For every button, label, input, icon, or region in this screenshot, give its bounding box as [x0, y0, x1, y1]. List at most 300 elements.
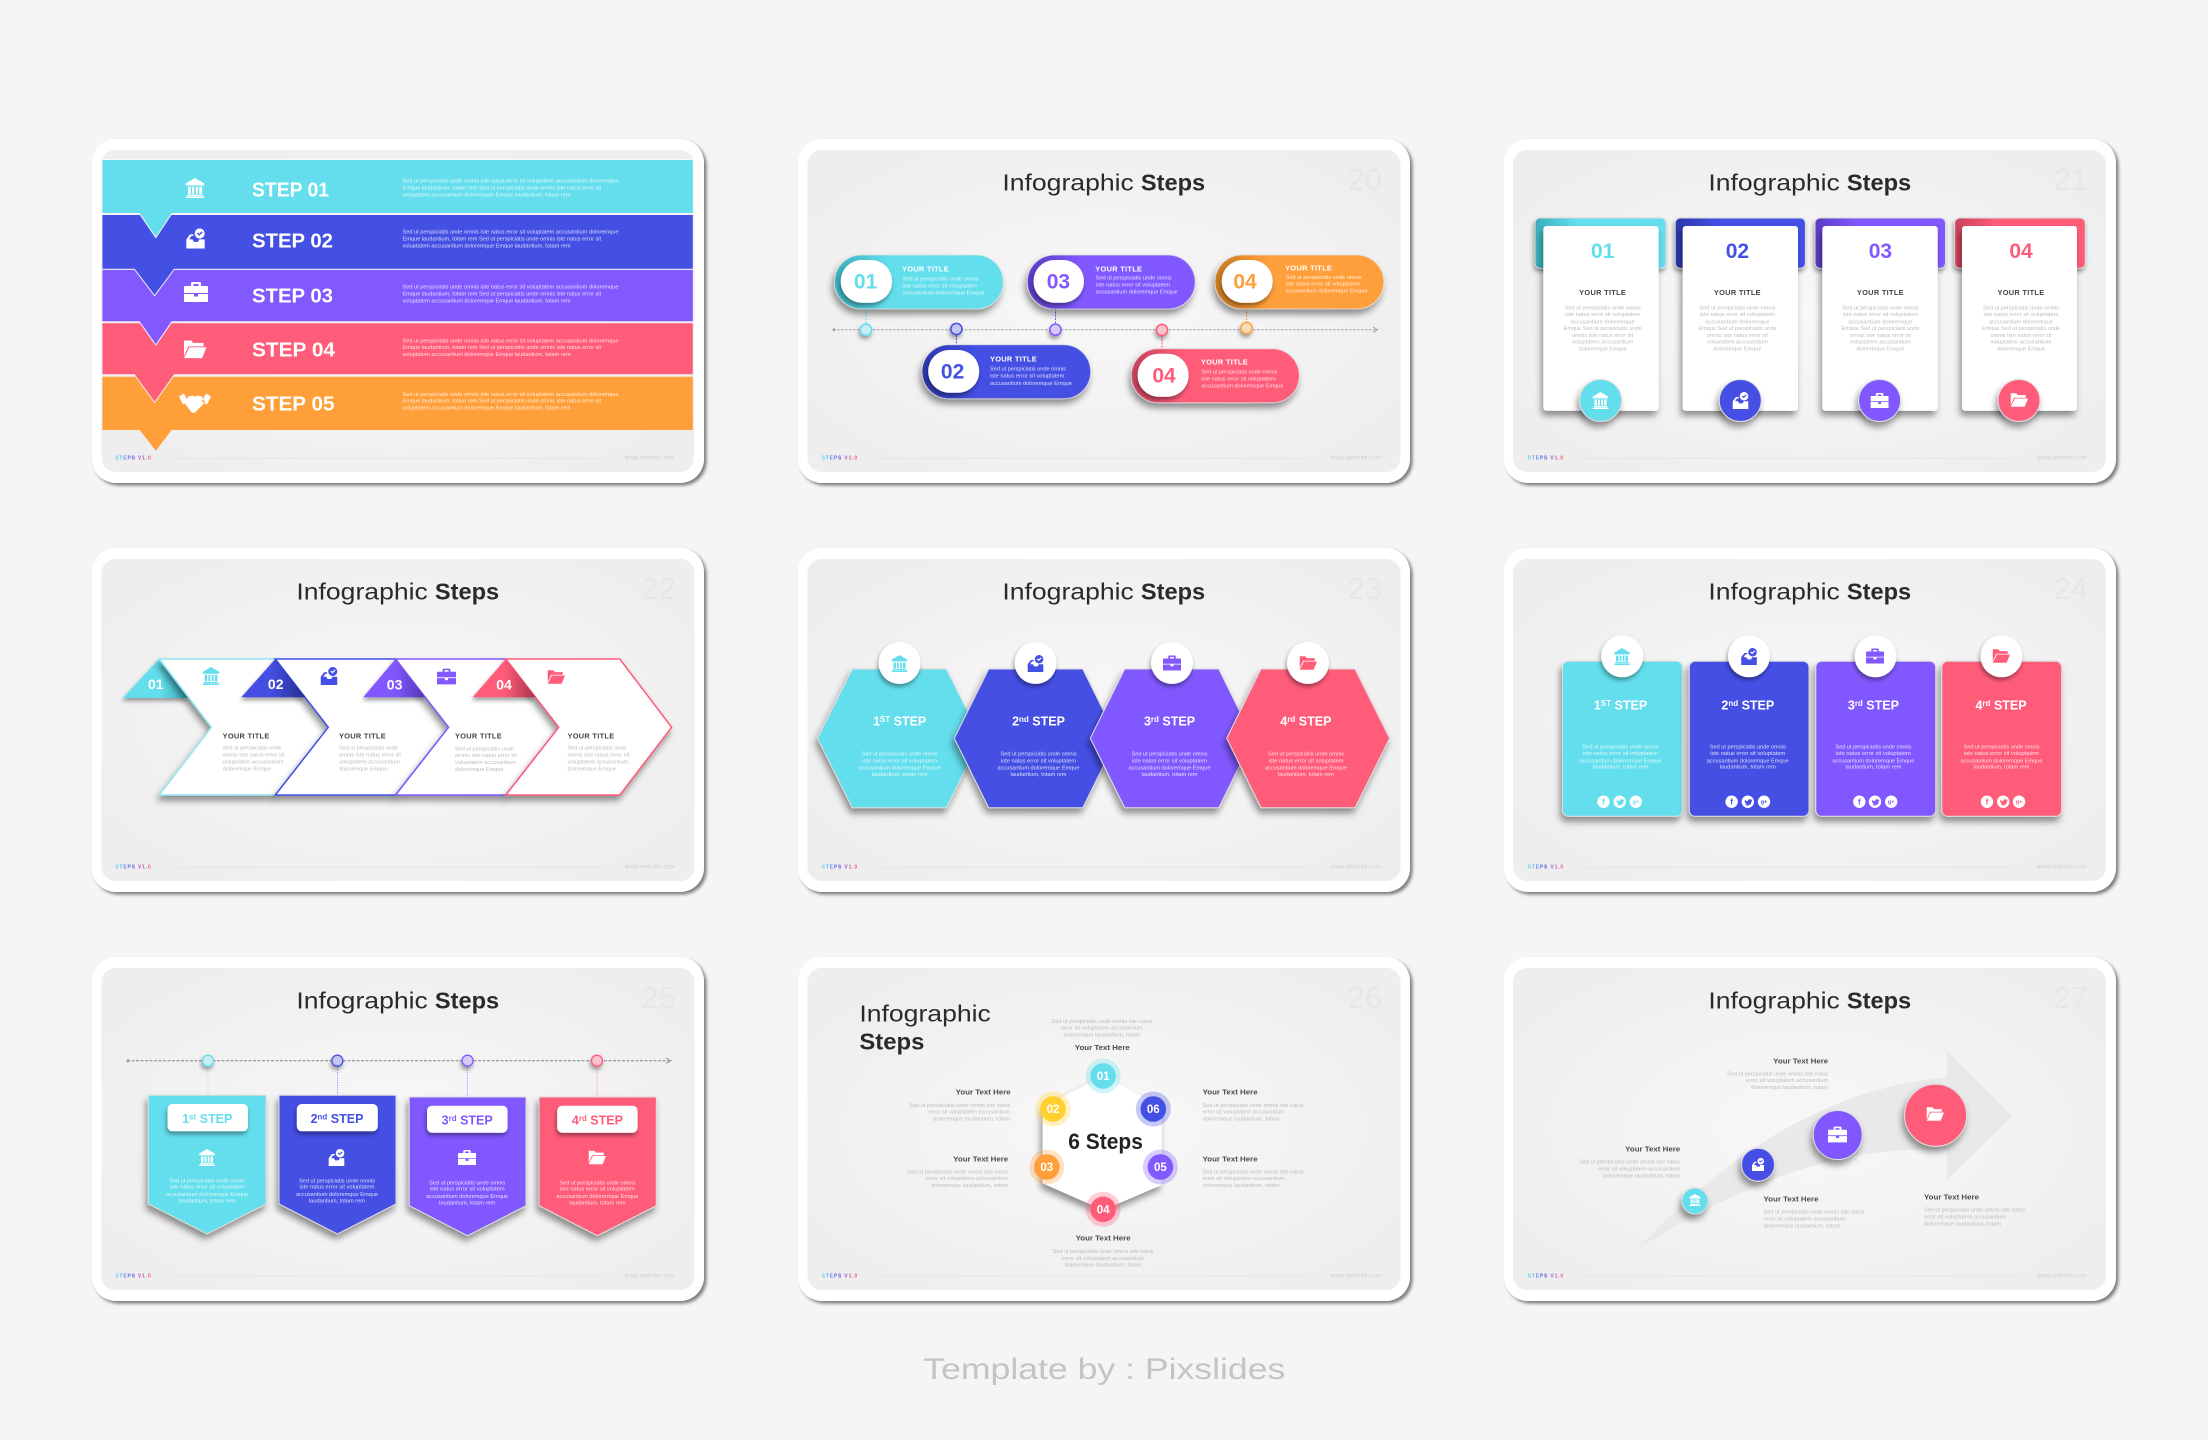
node 01: 01 [1097, 1071, 1110, 1083]
node 03: 03 [1040, 1162, 1053, 1174]
text block: step 05 description: Emque laudantium, totam rem Sed ut perspiciatis unde omnis iste natus error sit [402, 399, 602, 405]
pill: 01: iste natus error sit voluptatem [902, 283, 977, 289]
banner: 2nd step: laudantium, totam rem [309, 1199, 365, 1205]
card: 01: iste natus error sit voluptatem [1565, 312, 1640, 318]
title [859, 1001, 991, 1054]
hexagon: 1st step: 1 [873, 715, 880, 729]
band: step 03 purple [102, 270, 693, 344]
title: Steps [1141, 579, 1205, 605]
card: 04: doloremque Emque [1997, 347, 2045, 353]
text block: step 04 description: Emque laudantium, totam rem Sed ut perspiciatis unde omnis iste natus error sit [402, 345, 602, 351]
panel: slide 19 stacked step bands [92, 139, 704, 483]
node 06 [1136, 1092, 1171, 1126]
panel: slide 23 hexagons [798, 548, 1410, 892]
band: step 05 orange [102, 377, 693, 451]
text block: middle: error sit voluptatem accusantium [1764, 1217, 1846, 1223]
hexagon: 4rd step: laudantium, totam rem [1278, 772, 1334, 778]
hexagon: 1st step: ST [880, 715, 890, 724]
text block: left: error sit voluptatem accusantium [1598, 1166, 1680, 1172]
card: 01: Sed ut perspiciatis unde omnis [1565, 306, 1641, 312]
card: 1st step: Sed ut perspiciatis unde omnis [1582, 745, 1659, 751]
card: 2nd step: STEP [1738, 698, 1774, 712]
chevron: step 01: doloremque Emque [223, 767, 271, 773]
pill: 03: Sed ut perspiciatis unde omnis [1096, 276, 1172, 282]
card: 01: voluptatem accusantium [1572, 340, 1633, 346]
text block: bottom: error sit voluptatem accusantium [1062, 1256, 1144, 1262]
pill: 03: 03 [1047, 270, 1070, 293]
icon: briefcase [184, 282, 208, 302]
circle: step 1 [1682, 1188, 1708, 1214]
hexagon: 1st step: accusantium doloremque Emque [859, 765, 941, 771]
node 04: 04 [1097, 1204, 1110, 1216]
pill: 01: accusantium doloremque Emque [902, 291, 985, 297]
text block: right lower: Your Text Here [1203, 1155, 1258, 1164]
card: 3rd step: Sed ut perspiciatis unde omnis [1835, 745, 1912, 751]
text block: step 05 description: voluptatem accusantium doloremque Emque laudantium, totam rem [402, 406, 570, 412]
banner: 4rd step: iste natus error sit voluptatem [560, 1187, 635, 1193]
card: 1st step: STEP [1611, 698, 1647, 712]
icons: social links card 3: f [1858, 798, 1861, 806]
pill: 03: YOUR TITLE [1095, 264, 1142, 273]
banner: 1st step: STEP [196, 1112, 232, 1126]
banner: 1st step: accusantium doloremque Emque [166, 1192, 248, 1198]
title: Steps [435, 988, 499, 1014]
text block: step 01 description: voluptatem accusantium doloremque Emque laudantium, totam rem [402, 192, 570, 198]
timeline nodes [860, 322, 1252, 336]
connectors [208, 1067, 597, 1097]
chevron: step 03: YOUR TITLE [455, 732, 502, 741]
hexagon: 1st step [818, 642, 981, 808]
card: 01: YOUR TITLE [1579, 288, 1626, 297]
title: Infographic [859, 1001, 991, 1027]
icons: social links card 1 [1597, 796, 1642, 808]
card: 04: 04 [2009, 240, 2033, 263]
icons: social links card 2: g+ [1761, 800, 1767, 806]
text block: step 02 description: Emque laudantium, totam rem Sed ut perspiciatis unde omnis iste natus error sit [402, 236, 602, 242]
text block: step 02 description: Sed ut perspiciatis unde omnis iste natus error sit voluptatem accusantium doloremque [402, 230, 619, 236]
chevron: step 04: Sed ut perspiciatis unde [568, 746, 627, 752]
text block: top [1727, 1056, 1829, 1091]
card: 2nd step: Sed ut perspiciatis unde omnis [1710, 745, 1786, 751]
text block: middle: doloremque laudantium, totam [1764, 1224, 1840, 1230]
pill: 01: YOUR TITLE [902, 264, 949, 273]
text block: right lower: Sed ut perspiciatis unde omnis iste natus [1203, 1169, 1304, 1175]
banner: 2nd step: accusantium doloremque Emque [296, 1192, 378, 1198]
pill: 04 red: accusantium doloremque Emque [1201, 383, 1284, 389]
card: 03: 03 [1869, 240, 1892, 263]
footer [822, 1274, 1381, 1280]
banner: 3rd step: laudantium, totam rem [439, 1201, 495, 1207]
card: 01 [1535, 218, 1666, 422]
text block: left: Your Text Here [1625, 1145, 1680, 1154]
hexagon: 1st step: iste natus error sit voluptatem [862, 758, 937, 764]
text block: middle: Sed ut perspiciatis unde omnis iste natus [1764, 1210, 1865, 1216]
card: 2nd step: iste natus error sit voluptatem [1710, 751, 1785, 757]
hexagon: 2nd step: 2 [1012, 715, 1019, 729]
hexagon: 3rd step: STEP [1159, 715, 1195, 729]
card: 4rd step: rd [1982, 699, 1991, 708]
card: 4rd step: laudantium, totam rem [1974, 765, 2030, 771]
footer: STEPS V1.0 [115, 1274, 151, 1280]
card: 02: accusantium doloremque [1705, 319, 1770, 325]
text block: right: doloremque laudantium, totam [1924, 1221, 2001, 1227]
card: 03: iste natus error sit voluptatem [1843, 312, 1918, 318]
icon: inbox check [186, 228, 205, 248]
node 02: 02 [1047, 1104, 1059, 1116]
pill: 03: iste natus error sit voluptatem [1096, 283, 1170, 289]
hexagon: 2nd step: STEP [1029, 715, 1065, 729]
chevron: step 02: Sed ut perspiciatis unde [339, 746, 398, 752]
text block: left [1579, 1145, 1681, 1180]
footer [115, 865, 675, 871]
footer: www.website.com [1330, 865, 1381, 871]
slide number: 22 [642, 571, 676, 606]
text block: left upper: error sit voluptatem accusantium [928, 1110, 1010, 1116]
pill: 04 orange: Sed ut perspiciatis unde omnis [1286, 275, 1362, 281]
banner: 1st step [148, 1095, 266, 1234]
text block: right lower [1203, 1155, 1304, 1189]
slide number: 20 [1348, 162, 1382, 197]
hexagon: 1st step: Sed ut perspiciatis unde omnis [862, 752, 938, 758]
card: 3rd step: iste natus error sit voluptatem [1836, 751, 1911, 757]
card: 2nd step [1689, 635, 1809, 816]
text block: right [1924, 1192, 2025, 1227]
pill: 04 orange: 04 [1233, 270, 1257, 293]
slide number: 25 [642, 980, 676, 1015]
panel: slide 25 banners on timeline [92, 957, 704, 1301]
title [1002, 579, 1205, 605]
title: Steps [859, 1028, 924, 1054]
title [1708, 170, 1911, 196]
chevron: step 02: YOUR TITLE [339, 731, 386, 740]
footer: www.website.com [1330, 1274, 1381, 1280]
panel: slide 27 curved growth arrow [1504, 957, 2116, 1301]
footer: www.website.com [624, 456, 675, 462]
icon: bank [186, 178, 204, 198]
text block: right: error sit voluptatem accusantium [1924, 1214, 2006, 1220]
banner: 2nd step: iste natus error sit voluptatem [300, 1185, 374, 1191]
pill: 04 orange: iste natus error sit voluptatem [1286, 282, 1360, 288]
card: 3rd step: STEP [1863, 698, 1899, 712]
card: 4rd step: accusantium doloremque Emque [1960, 758, 2043, 764]
credit line: Template by : Pixslides [923, 1353, 1285, 1386]
footer [822, 456, 1381, 462]
title [296, 579, 499, 605]
chevron: step 03: doloremque Emque [455, 767, 504, 773]
hexagon: 4rd step: rd [1287, 715, 1295, 724]
banner: 3rd step [409, 1097, 526, 1236]
text block: left lower: doloremque laudantium, totam [931, 1183, 1008, 1189]
card: 3rd step: rd [1855, 699, 1863, 708]
hexagon: 2nd step: iste natus error sit voluptatem [1001, 758, 1076, 764]
card: 4rd step: STEP [1990, 698, 2027, 712]
footer: www.website.com [624, 1274, 675, 1280]
text block: top: error sit voluptatem accusantium [1061, 1026, 1143, 1032]
card: 4rd step: 4 [1975, 698, 1982, 712]
text block: left: Sed ut perspiciatis unde omnis iste natus [1579, 1160, 1681, 1166]
text block: step 03 description: voluptatem accusantium doloremque Emque laudantium, totam rem [402, 298, 570, 304]
connectors [866, 302, 1247, 349]
card: 03: accusantium doloremque [1848, 319, 1913, 325]
pill: 01: 01 [854, 270, 878, 293]
slide number: 26 [1348, 980, 1382, 1015]
pill: 01 [834, 255, 1003, 309]
banner: 1st step: iste natus error sit voluptatem [170, 1185, 245, 1191]
text block: top: doloremque laudantium, totam [1063, 1033, 1140, 1039]
chevron: step 04: doloremque Emque [568, 767, 616, 773]
chevron: step 04: voluptatem accusantium [568, 760, 628, 766]
circle: step 4 [1905, 1084, 1967, 1146]
text block: bottom: Your Text Here [1076, 1234, 1131, 1243]
banner: 4rd step [539, 1097, 656, 1236]
card: 2nd step: 2 [1721, 698, 1728, 712]
chevron: step 04: YOUR TITLE [568, 731, 614, 740]
hexagon: 3rd step: rd [1151, 715, 1159, 724]
text block: step 01 description [402, 179, 619, 198]
card: 1st step: ST [1601, 699, 1611, 708]
title: Infographic [1002, 170, 1134, 196]
icons: social links card 4: f [1986, 798, 1989, 806]
text block: top: Sed ut perspiciatis unde omnis iste natus [1051, 1019, 1153, 1025]
banner: 1st step: Sed ut perspiciatis unde omnis [169, 1178, 246, 1184]
card: 2nd step: accusantium doloremque Emque [1707, 758, 1789, 764]
title: Steps [435, 579, 499, 605]
chevron: step 03: Sed ut perspiciatis unde [455, 746, 514, 752]
title [1708, 988, 1911, 1014]
card: 3rd step: 3 [1848, 698, 1855, 712]
text block: step 01 description: Sed ut perspiciatis unde omnis iste natus error sit voluptatem accusantium doloremque [402, 179, 619, 185]
pill: 02: YOUR TITLE [990, 355, 1037, 364]
footer: STEPS V1.0 [822, 1274, 858, 1280]
card: 1st step: 1 [1594, 698, 1601, 712]
card: 02: iste natus error sit voluptatem [1700, 312, 1775, 318]
card: 01: doloremque Emque [1579, 347, 1627, 353]
text block: top: Sed ut perspiciatis unde omnis iste natus [1727, 1071, 1829, 1077]
card: 02 [1675, 218, 1805, 422]
text block: left lower: Your Text Here [953, 1155, 1008, 1164]
card: 04: Emque Sed ut perspiciatis unde [1982, 326, 2060, 332]
text block: left lower: error sit voluptatem accusantium [926, 1176, 1008, 1182]
pill: 04 red: 04 [1152, 364, 1176, 387]
banner: 3rd step: Sed ut perspiciatis unde omnis [429, 1180, 506, 1186]
icons: social links card 4: g+ [2016, 800, 2022, 806]
banner: 2nd step [279, 1095, 396, 1234]
text block: right upper: doloremque laudantium, totam [1203, 1117, 1280, 1123]
card: 1st step [1562, 635, 1682, 816]
footer: www.website.com [2036, 865, 2087, 871]
text block: step 04 description: Sed ut perspiciatis unde omnis iste natus error sit voluptatem accusantium doloremque [402, 338, 619, 344]
title: Infographic [296, 579, 428, 605]
icon: folder [184, 340, 206, 358]
icons: social links card 2 [1725, 796, 1770, 808]
chevron: step 01: 01 [148, 676, 164, 692]
chevron: step 03: voluptatem accusantium [455, 760, 516, 766]
card: 02: omnis iste natus error sit [1707, 333, 1768, 339]
pill: 02: accusantium doloremque Emque [990, 381, 1072, 387]
hexagon: 4rd step: 4 [1280, 715, 1287, 729]
card: 01: 01 [1591, 240, 1615, 263]
panel: slide 22 chevrons [92, 548, 704, 892]
heading: step 01: STEP 01 [252, 180, 329, 202]
card: 1st step: iste natus error sit voluptatem [1583, 751, 1658, 757]
chevron: step 01 [123, 659, 328, 795]
footer: STEPS V1.0 [115, 456, 151, 462]
footer [1528, 865, 2087, 871]
hexagon: 3rd step [1090, 642, 1253, 808]
card: 4rd step: Sed ut perspiciatis unde omnis [1964, 745, 2040, 751]
banner: 3rd step: rd [449, 1114, 457, 1123]
pill: 02 [922, 345, 1091, 399]
title: Steps [1847, 579, 1911, 605]
panel: slide 20 pill timeline [798, 139, 1410, 483]
text block: top: error sit voluptatem accusantium [1746, 1078, 1828, 1084]
title [1002, 170, 1205, 196]
pill: 02: iste natus error sit voluptatem [990, 374, 1064, 380]
node 05 [1143, 1150, 1178, 1184]
card: 2nd step: nd [1728, 699, 1738, 708]
card: 03: Emque Sed ut perspiciatis unde [1841, 326, 1920, 332]
chevron: step 01: YOUR TITLE [223, 731, 270, 740]
hexagon: 4rd step: STEP [1295, 715, 1331, 729]
hexagon: 2nd step: accusantium doloremque Emque [998, 765, 1080, 771]
text block: right upper [1203, 1088, 1304, 1123]
card: 03: Sed ut perspiciatis unde omnis [1842, 306, 1919, 312]
card: 02: doloremque Emque [1713, 347, 1762, 353]
card: 04: Sed ut perspiciatis unde omnis [1983, 306, 2059, 312]
icons: social links card 1: g+ [1633, 800, 1639, 806]
icon: handshake [179, 394, 211, 413]
card: 01: Emque Sed ut perspiciatis unde [1564, 326, 1642, 332]
text block: right: Sed ut perspiciatis unde omnis iste natus [1924, 1207, 2025, 1213]
banner: 4rd step: 4 [572, 1114, 579, 1128]
text block: step 04 description: voluptatem accusantium doloremque Emque laudantium, totam rem [402, 352, 570, 358]
card: 03: doloremque Emque [1856, 347, 1905, 353]
banner: 1st step: laudantium, totam rem [179, 1199, 235, 1205]
chevron: step 04 [473, 659, 672, 795]
text block: right upper: Sed ut perspiciatis unde omnis iste natus [1203, 1103, 1304, 1109]
hexagon: 2nd step: laudantium, totam rem [1010, 772, 1066, 778]
card: 02: 02 [1726, 240, 1749, 263]
text block: left upper: Sed ut perspiciatis unde omnis iste natus [909, 1103, 1011, 1109]
chevron: step 02: voluptatem accusantium [339, 760, 400, 766]
text block: step 05 description [402, 392, 619, 412]
pill: 04 red [1131, 349, 1299, 403]
footer: STEPS V1.0 [115, 865, 151, 871]
card: 1st step: accusantium doloremque Emque [1580, 758, 1662, 764]
chevron: step 04: omnis iste natus error sit [568, 753, 630, 759]
band: step 04 red [102, 323, 693, 402]
hexagon: 3rd step: laudantium, totam rem [1142, 772, 1198, 778]
pill: 04 red: Sed ut perspiciatis unde omnis [1201, 369, 1278, 375]
pill: 04 orange: accusantium doloremque Emque [1286, 289, 1368, 295]
chevron: step 03 [363, 659, 559, 795]
card: 03: YOUR TITLE [1857, 288, 1904, 297]
card: 1st step: laudantium, totam rem [1592, 765, 1648, 771]
panel: slide 26 six steps hexagon [798, 957, 1410, 1301]
card: 3rd step: laudantium, totam rem [1845, 765, 1901, 771]
card: 04: voluptatem accusantium [1990, 340, 2052, 346]
panel: slide 21 white cards [1504, 139, 2116, 483]
pill: 04 orange [1215, 255, 1384, 309]
hexagon: 2nd step: Sed ut perspiciatis unde omnis [1000, 752, 1077, 758]
chevron: step 02: 02 [268, 676, 284, 692]
card: 4rd step [1942, 635, 2062, 816]
card: 3rd step: accusantium doloremque Emque [1832, 758, 1915, 764]
banner: 3rd step: iste natus error sit voluptatem [430, 1187, 505, 1193]
icons: social links card 1: f [1602, 798, 1605, 806]
node 01 [1086, 1058, 1121, 1094]
banner: 1st step: st [189, 1112, 197, 1122]
node 05: 05 [1154, 1162, 1167, 1174]
card: 3rd step [1816, 635, 1936, 816]
heading: step 03: STEP 03 [252, 285, 333, 307]
card: 4rd step: iste natus error sit voluptatem [1964, 751, 2039, 757]
timeline nodes [202, 1055, 602, 1066]
banner: 4rd step: accusantium doloremque Emque [556, 1194, 639, 1200]
band: step 01 teal [102, 160, 693, 237]
pill: 04 red: iste natus error sit voluptatem [1201, 376, 1276, 382]
icons: social links card 3 [1853, 796, 1897, 808]
footer: STEPS V1.0 [822, 456, 858, 462]
banner: 3rd step: accusantium doloremque Emque [426, 1194, 508, 1200]
card: 04: YOUR TITLE [1998, 288, 2044, 297]
card: 02: Sed ut perspiciatis unde omnis [1699, 306, 1776, 312]
timeline with arrow [126, 1058, 671, 1063]
circle: step 3 [1813, 1110, 1862, 1160]
hexagon: 1st step: laudantium, totam rem [872, 772, 928, 778]
banner: 1st step: 1 [182, 1112, 189, 1126]
footer: STEPS V1.0 [1528, 1274, 1564, 1280]
hexagon: 4rd step [1227, 642, 1390, 808]
text block: step 03 description: Emque laudantium, totam rem Sed ut perspiciatis unde omnis iste natus error sit [402, 291, 602, 297]
banner: 4rd step: Sed ut perspiciatis unde omnis [559, 1180, 636, 1186]
banner: 4rd step: STEP [587, 1114, 623, 1128]
footer: www.website.com [2036, 1274, 2087, 1280]
footer: www.website.com [2036, 456, 2087, 462]
chevron: step 03: 03 [387, 677, 403, 693]
hexagon: 4rd step: iste natus error sit voluptatem [1268, 758, 1344, 764]
hexagon core [1043, 1076, 1162, 1210]
text block: bottom: doloremque laudantium, totam [1065, 1263, 1142, 1269]
text block: step 02 description: voluptatem accusantium doloremque Emque laudantium, totam rem [402, 243, 570, 249]
banner: 4rd step: rd [579, 1114, 587, 1123]
text block: top: Your Text Here [1773, 1056, 1828, 1065]
title: Steps [1141, 170, 1205, 196]
hexagon core: 6 Steps [1068, 1129, 1143, 1154]
node 06: 06 [1147, 1104, 1160, 1116]
card: 01: accusantium doloremque [1571, 319, 1635, 325]
pill: 02: 02 [941, 360, 964, 383]
text block: step 01 description: Emque laudantium, totam rem Sed ut perspiciatis unde omnis iste natus error sit [402, 185, 602, 191]
banner: 2nd step: nd [318, 1112, 327, 1122]
footer: STEPS V1.0 [1528, 865, 1564, 871]
card: 04: omnis iste natus error sit [1990, 333, 2052, 339]
pill: 02: Sed ut perspiciatis unde omnis [990, 367, 1066, 373]
pill: 01: Sed ut perspiciatis unde omnis [902, 277, 979, 283]
footer [115, 456, 675, 462]
hexagon: 3rd step: Sed ut perspiciatis unde omnis [1132, 752, 1208, 758]
card: 02: Emque Sed ut perspiciatis unde [1698, 326, 1777, 332]
hexagon: 2nd step: nd [1019, 715, 1029, 724]
title [296, 988, 499, 1014]
heading: step 04: STEP 04 [252, 340, 336, 362]
text block: left lower: Sed ut perspiciatis unde omnis iste natus [907, 1169, 1008, 1175]
card: 04: iste natus error sit voluptatem [1984, 312, 2058, 318]
text block: left upper: doloremque laudantium, totam [933, 1117, 1010, 1123]
footer [822, 865, 1381, 871]
hexagon: 1st step: STEP [890, 715, 926, 729]
text block: step 04 description [402, 338, 619, 358]
